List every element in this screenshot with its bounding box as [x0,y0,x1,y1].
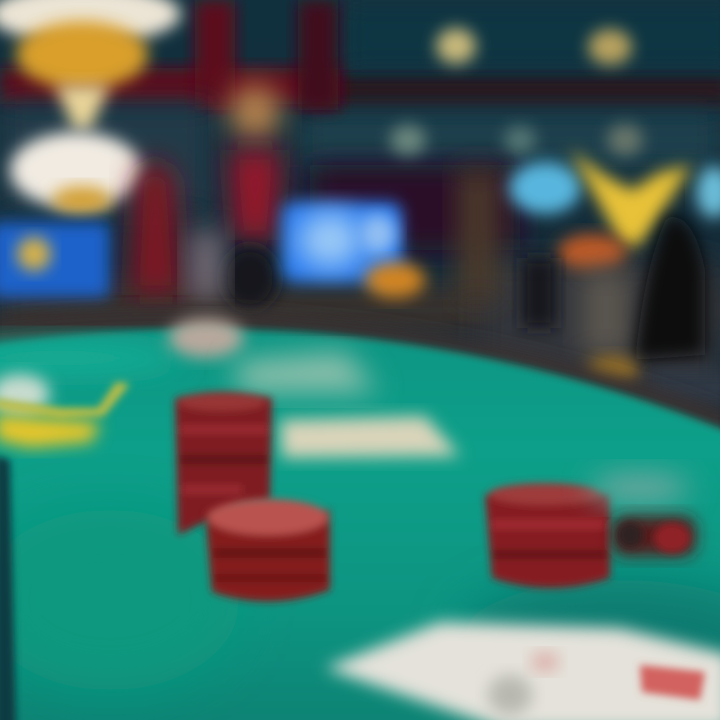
blue screen left [0,222,110,298]
chandelier [0,0,181,214]
left yellow betting mark [0,374,130,448]
people in background [130,84,282,310]
small chips far right [590,472,696,556]
blue screen centre [282,202,425,298]
green felt table [0,329,720,720]
right background figures and yellow glow [458,150,720,406]
playing cards foreground [325,622,720,720]
felt shading [0,340,720,700]
chip stack: rear [175,392,272,535]
felt card shapes [168,318,460,458]
table rim [0,309,720,445]
chip stack: right [485,483,610,588]
table left edge [0,455,16,720]
chip stack: front [205,499,330,602]
ceiling lights [390,28,643,156]
